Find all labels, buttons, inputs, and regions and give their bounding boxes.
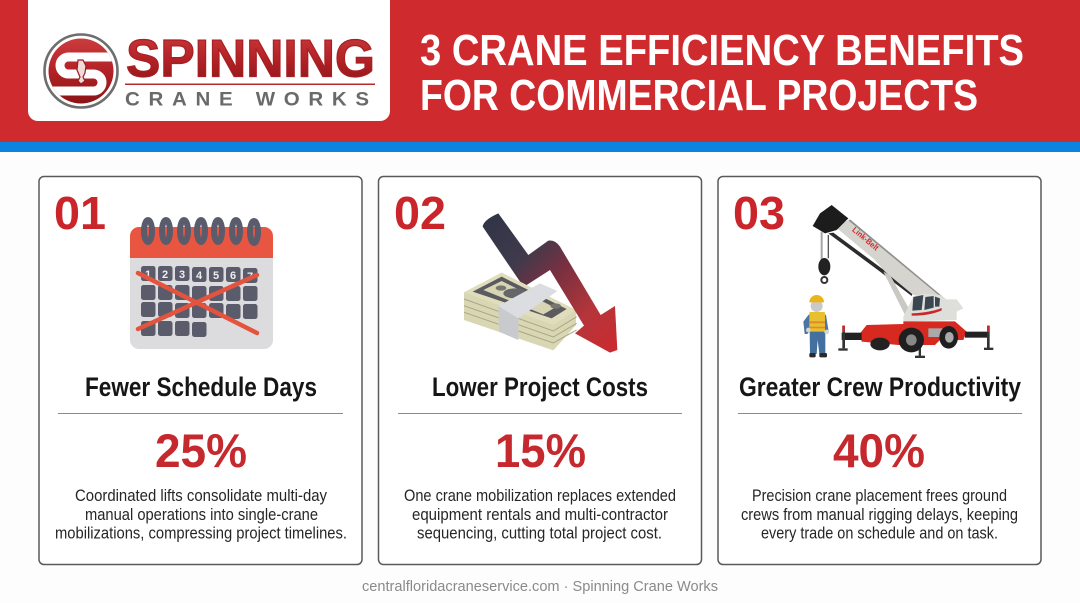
number 02: 02 xyxy=(394,187,446,239)
logo emblem xyxy=(44,34,120,108)
statistic 15%: 15% xyxy=(495,424,586,477)
worker xyxy=(803,295,829,357)
icon: crane and worker xyxy=(803,205,993,358)
footer: centralfloridacraneservice.com · Spinning Crane Works xyxy=(362,578,718,595)
icon: crossed-out calendar: 3 xyxy=(179,269,185,281)
description: Precision crane placement frees ground xyxy=(752,487,1007,505)
title xyxy=(420,26,1024,120)
logo panel xyxy=(28,0,390,121)
number 01: 01 xyxy=(54,187,106,239)
icon: crossed-out calendar: 6 xyxy=(230,270,236,282)
description: manual operations into single-crane xyxy=(85,506,318,524)
header band xyxy=(0,0,1080,152)
crane xyxy=(813,205,993,358)
icon: crossed-out calendar: 2 xyxy=(162,269,168,281)
description: crews from manual rigging delays, keeping xyxy=(741,506,1018,524)
icon: crossed-out calendar: 5 xyxy=(213,270,219,282)
description: every trade on schedule and on task. xyxy=(761,524,998,542)
panel: fewer schedule days xyxy=(39,176,362,564)
statistic 40%: 40% xyxy=(833,424,925,477)
panel: lower project costs xyxy=(378,176,702,564)
icon: crossed-out calendar: 1 xyxy=(145,269,151,281)
description xyxy=(404,487,676,542)
logo wordmark: SPINNING xyxy=(126,30,375,88)
heading: Lower Project Costs xyxy=(432,372,648,402)
logo wordmark: CRANE WORKS xyxy=(125,89,369,110)
title: FOR COMMERCIAL PROJECTS xyxy=(420,71,978,120)
heading: Greater Crew Productivity xyxy=(739,372,1021,402)
description: One crane mobilization replaces extended xyxy=(404,487,676,505)
brand label on boom: Link-Belt xyxy=(850,225,881,253)
description: Coordinated lifts consolidate multi-day xyxy=(75,487,328,505)
icon: crossed-out calendar xyxy=(130,220,273,349)
description: equipment rentals and multi-contractor xyxy=(412,506,668,524)
heading: Fewer Schedule Days xyxy=(85,372,317,402)
panel: greater crew productivity xyxy=(718,176,1041,564)
description xyxy=(55,487,347,542)
description: mobilizations, compressing project timelines. xyxy=(55,524,347,542)
icon: cash stack with falling arrow xyxy=(464,213,617,353)
description xyxy=(741,487,1018,542)
icon: crossed-out calendar: 4 xyxy=(196,270,203,282)
description: sequencing, cutting total project cost. xyxy=(417,524,662,542)
icon: crossed-out calendar: 7 xyxy=(247,271,253,283)
number 03: 03 xyxy=(733,187,785,239)
statistic 25%: 25% xyxy=(155,424,247,477)
